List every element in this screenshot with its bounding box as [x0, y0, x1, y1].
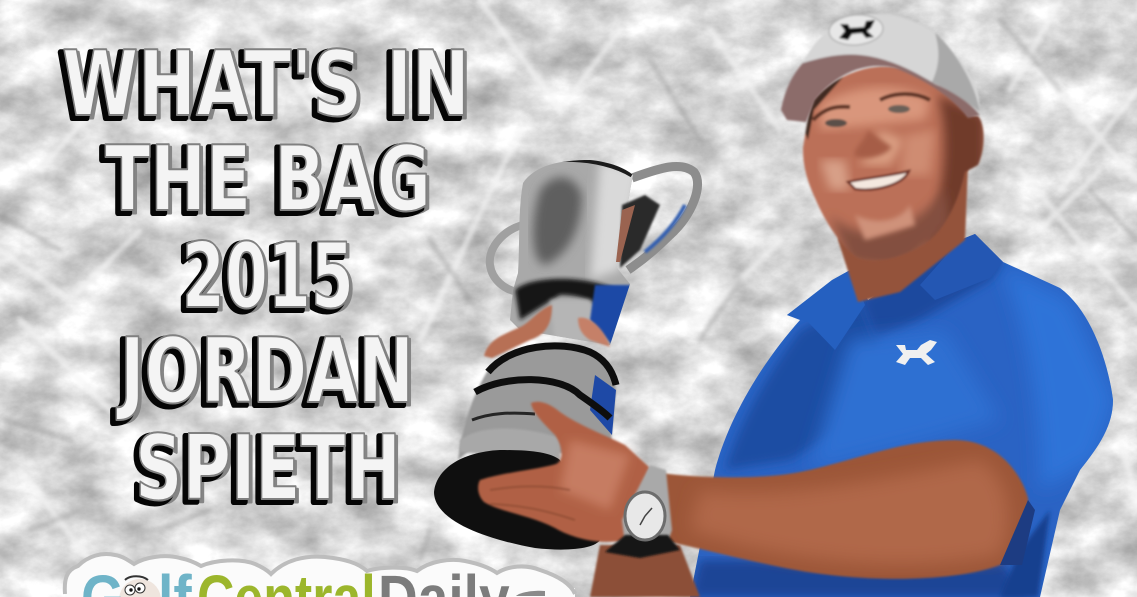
trophy base	[434, 450, 600, 550]
logo badge	[65, 554, 575, 597]
title line: 2015: 2015	[184, 227, 356, 332]
title	[58, 32, 472, 524]
cap	[781, 13, 980, 122]
upper hand	[484, 305, 610, 358]
title line: JORDAN: JORDAN	[116, 319, 414, 424]
title line: WHAT'S IN: WHAT'S IN	[64, 35, 472, 140]
wristwatch	[605, 465, 680, 558]
trophy cup	[510, 160, 633, 345]
lower hand	[478, 402, 650, 542]
icon: golf club head	[516, 591, 545, 596]
collar	[787, 270, 865, 350]
title line: WHAT'S IN: WHAT'S IN	[58, 35, 466, 140]
logo cloud shape	[65, 554, 575, 597]
smile	[848, 171, 909, 190]
golfer shirt	[690, 234, 1115, 597]
title line: WHAT'S IN: WHAT'S IN	[62, 32, 470, 137]
shirt logo	[896, 340, 937, 365]
photo: golfer holding trophy	[434, 13, 1115, 597]
face	[802, 67, 985, 270]
logo wordmark: GolfCentralDaily	[81, 570, 510, 597]
eyes and brows	[813, 107, 850, 120]
trophy	[434, 159, 698, 550]
cap logo	[839, 20, 875, 40]
trophy bands	[458, 343, 616, 460]
title line: SPIETH: SPIETH	[131, 419, 397, 524]
trophy handles	[490, 225, 522, 292]
title line: THE BAG: THE BAG	[105, 127, 431, 232]
forearm	[660, 440, 1028, 579]
title line: 2015	[178, 224, 356, 332]
neck	[838, 165, 968, 302]
title line: JORDAN: JORDAN	[118, 322, 416, 427]
title line: JORDAN: JORDAN	[112, 322, 410, 427]
title line: SPIETH: SPIETH	[135, 416, 401, 521]
title line: THE BAG: THE BAG	[101, 130, 427, 235]
title line: THE BAG: THE BAG	[107, 130, 433, 235]
nose	[855, 130, 892, 158]
title line: 2015: 2015	[182, 224, 354, 329]
title line: 2015: 2015	[178, 227, 350, 332]
title line: SPIETH: SPIETH	[137, 419, 403, 524]
icon: cartoon golf ball	[119, 576, 161, 597]
